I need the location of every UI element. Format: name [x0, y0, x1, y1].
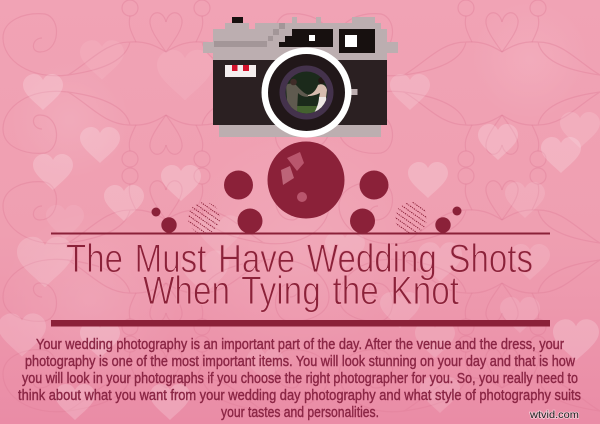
- camera body: [213, 60, 387, 125]
- viewfinder right: [339, 29, 375, 53]
- title: [66, 237, 533, 313]
- camera top plate: [203, 23, 398, 60]
- camera base: [219, 125, 381, 137]
- camera grip strip: [214, 23, 285, 47]
- camera top bumps: [292, 17, 375, 23]
- top rule: [51, 232, 550, 234]
- hatched circles: [188, 202, 427, 234]
- lens photo of couple: [285, 71, 328, 114]
- camera dial: [232, 17, 243, 23]
- icon: camera: [203, 17, 398, 138]
- title: When Tying the Knot: [143, 269, 459, 313]
- body text: your tastes and personalities.: [221, 405, 379, 421]
- lens rings: [262, 48, 352, 138]
- camera label: [225, 65, 256, 77]
- big maroon lens ball: [268, 142, 344, 218]
- decorative circles: [152, 170, 462, 234]
- body text: [18, 337, 581, 421]
- viewfinder left: [279, 29, 333, 47]
- thick rule: [51, 320, 550, 326]
- watermark: wtvid.com: [529, 409, 579, 421]
- lens button: [350, 89, 358, 95]
